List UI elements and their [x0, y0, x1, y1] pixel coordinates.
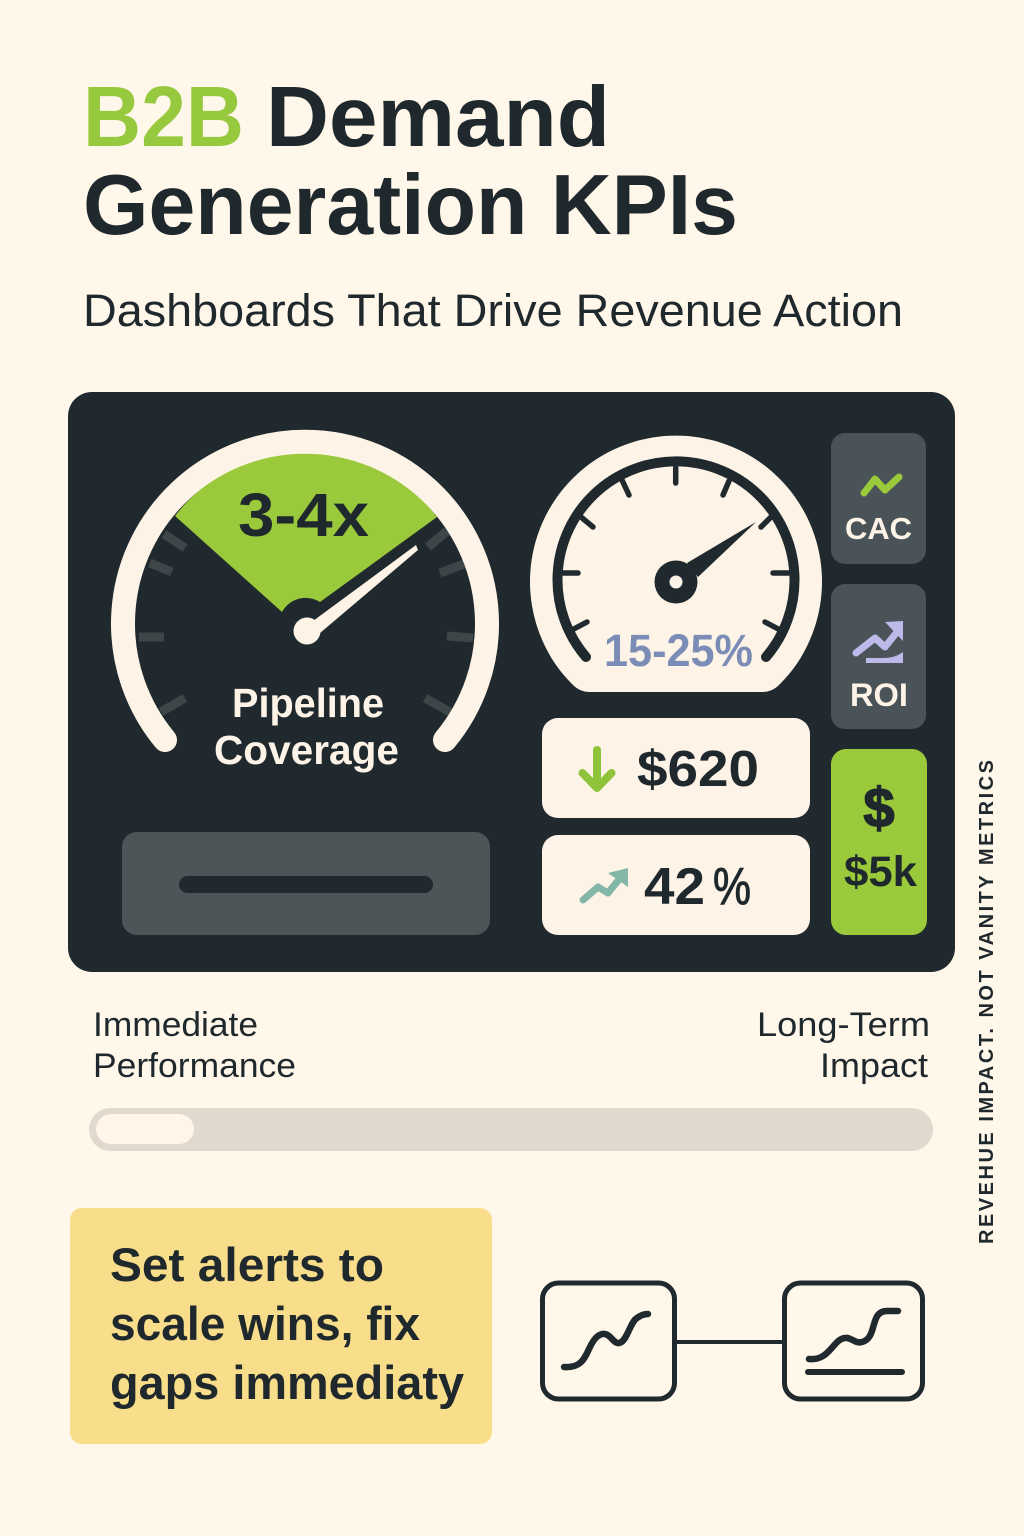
label: immediate performance: Immediate: [93, 1006, 258, 1044]
card: $5k: [831, 749, 927, 935]
slate placeholder bar: [122, 832, 490, 935]
label: CAC: CAC: [845, 511, 912, 546]
green target zone: [175, 451, 437, 612]
callout text: scale wins, fix: [110, 1297, 420, 1350]
value: 42%: 42: [644, 858, 705, 916]
card: 42%: [542, 835, 810, 935]
connected chart icons: [542, 1283, 922, 1399]
big gauge: pipeline coverage: [123, 442, 487, 773]
value: $620: $620: [637, 740, 759, 797]
icon: down arrow: [582, 750, 612, 788]
value: 42%: [644, 858, 751, 916]
dial needle: [654, 522, 756, 604]
gauge arc: [123, 442, 487, 740]
label: long-term impact: Long-Term: [757, 1006, 930, 1044]
label: immediate performance: Performance: [93, 1047, 296, 1085]
icon: ROI growth: [856, 621, 903, 663]
label: long-term impact: Impact: [820, 1047, 929, 1085]
gauge body: [530, 436, 822, 692]
gauge label: [214, 680, 399, 773]
label: ROI: ROI: [850, 677, 908, 713]
card: CAC: [831, 433, 926, 564]
callout text: gaps immediaty: [110, 1356, 464, 1409]
connector line: [676, 1340, 783, 1344]
value: 42%: %: [713, 858, 751, 916]
title: Generation KPIs: [83, 158, 738, 253]
value: 15-25%: 15-25%: [604, 625, 753, 676]
card: ROI: [831, 584, 926, 729]
small gauge: [530, 436, 822, 692]
value: 3-4x: 3-4x: [238, 481, 369, 549]
needle: [294, 545, 418, 644]
title: Demand: [266, 70, 610, 165]
title: [83, 70, 738, 253]
gauge label: Pipeline: [232, 680, 384, 726]
timeline slider: [89, 1108, 933, 1151]
callout: [70, 1208, 492, 1444]
gauge label: Coverage: [214, 727, 399, 773]
card: $620: [542, 718, 810, 818]
callout text: Set alerts to: [110, 1238, 384, 1291]
icon: chart B: [784, 1283, 922, 1399]
label: immediate performance: [93, 1006, 296, 1085]
icon: chart A: [542, 1283, 674, 1399]
panel: dashboard: [68, 392, 955, 972]
title: B2B: [83, 70, 244, 165]
value: $5k: $5k: [844, 848, 917, 896]
icon: CAC trend: [864, 477, 899, 493]
callout text: [110, 1238, 464, 1409]
gauge dial: [558, 461, 795, 657]
vertical side note: REVEHUE IMPACT. NOT VANITY METRICS: [976, 760, 998, 1244]
gauge ticks: [139, 531, 473, 712]
label: long-term impact: [757, 1006, 930, 1085]
icon: up-right arrow: [583, 868, 628, 900]
icon: dollar sign: $: [863, 776, 895, 839]
subtitle: Dashboards That Drive Revenue Action: [83, 285, 903, 336]
